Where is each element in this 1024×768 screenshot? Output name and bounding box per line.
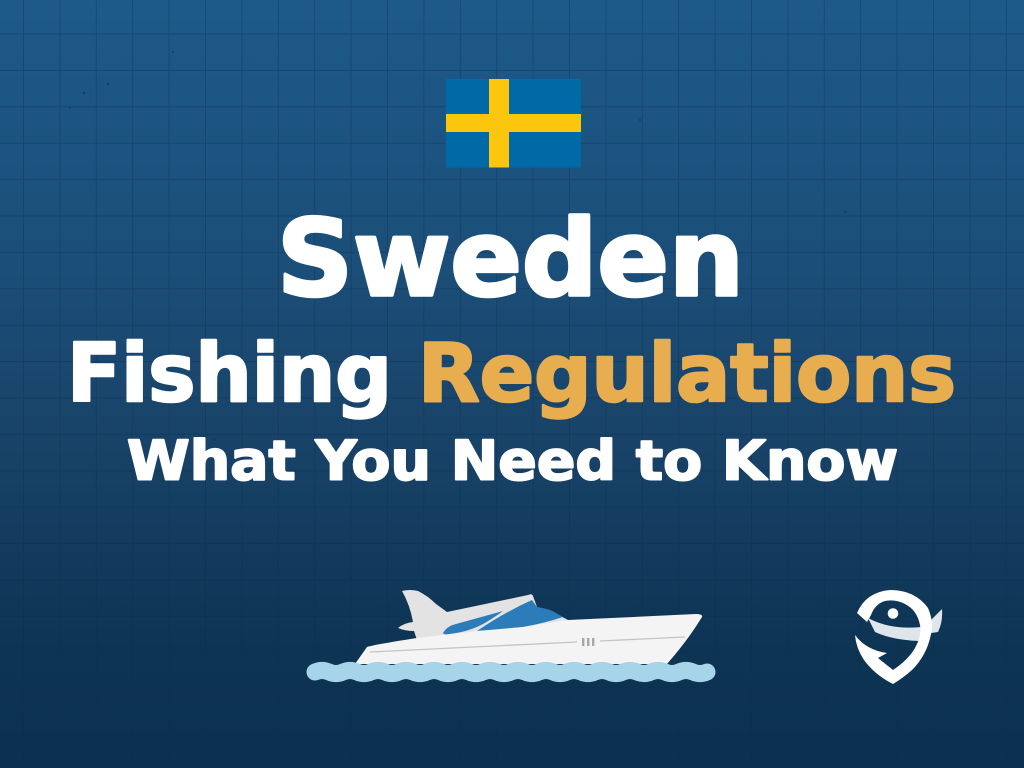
logo hook body [855, 590, 932, 684]
water wave [315, 670, 707, 674]
boat cabin and fin [398, 590, 568, 640]
boat hull [355, 614, 702, 664]
icon: fish hook logo [855, 590, 942, 684]
icon: motor yacht on water [315, 590, 707, 674]
title: Sweden: Sweden [277, 198, 744, 320]
heading word: Fishing: Fishing [67, 327, 392, 420]
subtitle: What You Need to Know: What You Need to Know [127, 430, 898, 492]
icon: Swedish flag [446, 79, 581, 168]
heading word: Regulations: Regulations [418, 327, 956, 420]
logo eye [888, 608, 898, 619]
heading: Fishing Regulations [67, 327, 956, 420]
logo band and tail [868, 609, 942, 641]
hull stripe and vents [370, 637, 685, 652]
boat windows [443, 611, 503, 634]
